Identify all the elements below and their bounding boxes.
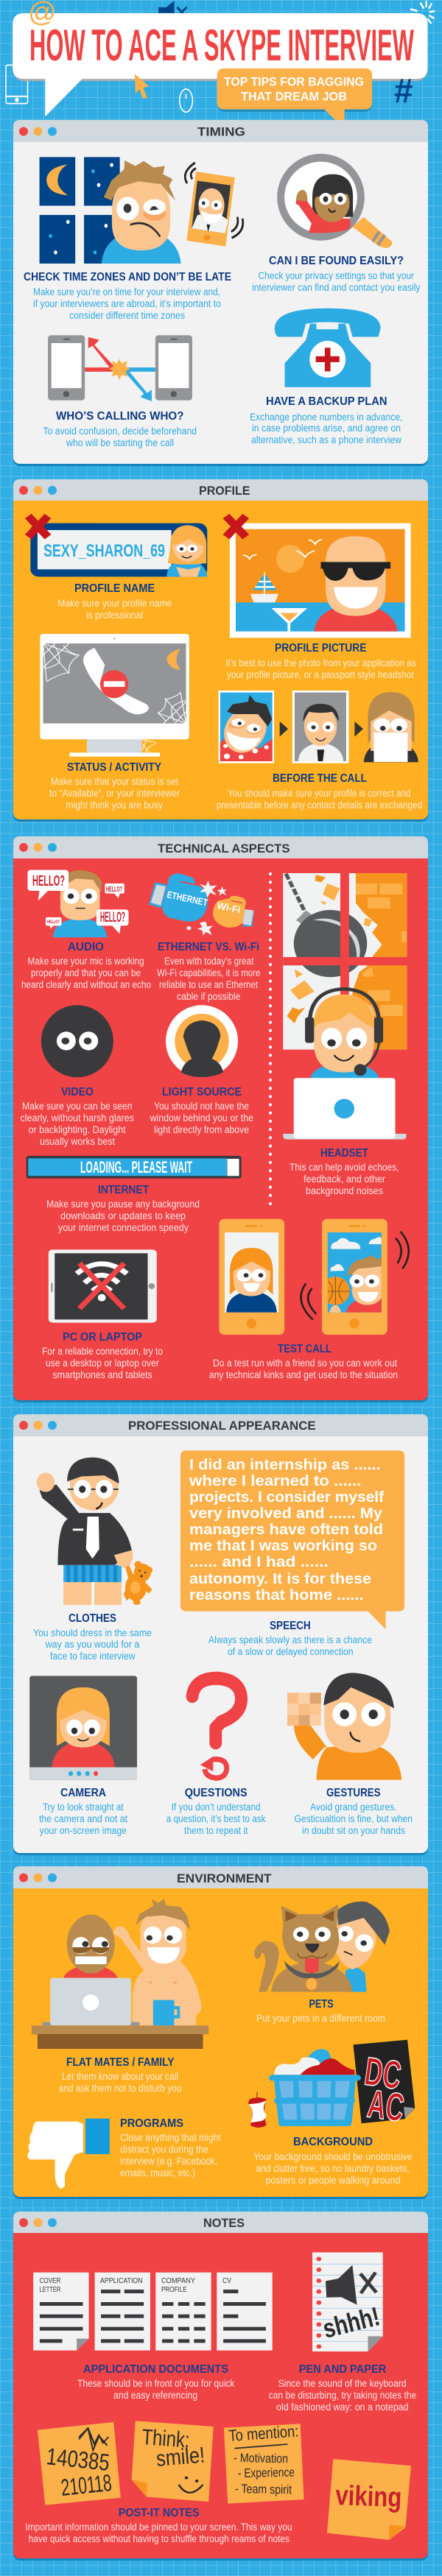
speech bubble: I did an internship as ...... bbox=[189, 1456, 381, 1473]
text: flat mates bbox=[59, 2071, 181, 2094]
text: gestures bbox=[295, 1802, 413, 1836]
text: speech: Always speak slowly as there is a chance bbox=[208, 1634, 372, 1645]
text: internet: downloads or updates to keep bbox=[60, 1210, 186, 1221]
icon: camera on-screen woman bbox=[29, 1676, 137, 1780]
text: pc or laptop: smartphones and tablets bbox=[53, 1369, 152, 1380]
heading: headset: HEADSET bbox=[320, 1147, 368, 1160]
text: camera: your on-screen image bbox=[40, 1825, 127, 1836]
window dots bbox=[19, 1421, 57, 1430]
text: gestures: Gesticualtion is fine, but when bbox=[295, 1813, 413, 1824]
icon: application documents: APPLICATION bbox=[100, 2276, 143, 2285]
icon: headset person with wrecking ball bbox=[283, 873, 407, 1140]
text: ethernet bbox=[157, 956, 261, 1002]
icon: emergency telephone bbox=[275, 308, 381, 387]
text: background: Your background should be unobtrusive bbox=[253, 2151, 413, 2162]
icon: boxing gloves ethernet vs wifi bbox=[149, 873, 253, 936]
speech bubble: reasons that home ...... bbox=[189, 1587, 364, 1603]
text: camera: Try to look straight at bbox=[43, 1802, 124, 1813]
speech bubble: where I learned to ...... bbox=[189, 1472, 361, 1489]
icon: tablet no wifi bbox=[49, 1249, 157, 1323]
speech bubble bbox=[180, 1450, 404, 1629]
text: post-it notes bbox=[25, 2522, 292, 2544]
heading: time zones: CHECK TIME ZONES AND DON’T BE LATE bbox=[24, 271, 231, 283]
text: audio: Make sure your mic is working bbox=[28, 956, 144, 967]
text: internet: Make sure you pause any background bbox=[46, 1199, 200, 1210]
icon: post-it notes: - Team spirit bbox=[235, 2482, 292, 2496]
text: questions bbox=[166, 1802, 266, 1836]
text: gestures: Avoid grand gestures. bbox=[310, 1802, 396, 1813]
text: post-it notes: Important information should be pinned to your screen. This way you bbox=[25, 2522, 292, 2533]
window dots bbox=[19, 486, 57, 495]
text: clothes: face to face interview bbox=[50, 1651, 136, 1662]
text: questions: them to repeat it bbox=[184, 1825, 248, 1836]
subtitle bubble bbox=[217, 68, 372, 129]
text: clothes: way as you would for a bbox=[45, 1639, 140, 1650]
icon: tired person at night with phone bbox=[40, 157, 243, 264]
logo: viking post-it: viking bbox=[335, 2480, 402, 2513]
heading: flat mates: FLAT MATES / FAMILY bbox=[66, 2056, 175, 2069]
heading: status: STATUS / ACTIVITY bbox=[67, 761, 162, 774]
text: flat mates: Let them know about your call bbox=[62, 2071, 178, 2082]
icon: magnifier with woman bbox=[277, 154, 392, 248]
loading bar bbox=[27, 1156, 242, 1179]
text: profile picture bbox=[225, 657, 416, 680]
icon: tablet outline bbox=[6, 65, 28, 104]
icon: post-it notes: To mention: bbox=[228, 2421, 299, 2445]
text: pen and paper: old fashioned way: on a notepad bbox=[276, 2402, 408, 2413]
text: profile name bbox=[57, 598, 172, 621]
text: gestures: in doubt sit on your hands bbox=[302, 1825, 405, 1836]
heading: ethernet: ETHERNET VS. Wi-Fi bbox=[158, 941, 259, 953]
text: video bbox=[21, 1101, 134, 1147]
text: found: Check your privacy settings so that your bbox=[258, 270, 414, 281]
text: found: interviewer can find and contact you easily bbox=[252, 282, 421, 293]
icon: notepad shhh bbox=[312, 2252, 383, 2351]
text: test call bbox=[209, 1358, 398, 1380]
heading: camera: CAMERA bbox=[60, 1787, 106, 1799]
text: application documents: and easy referencing bbox=[113, 2390, 197, 2401]
text: post-it notes: have quick access without having to shuffle through reams of notes bbox=[29, 2533, 290, 2544]
text: light source: window behind you or the bbox=[150, 1112, 253, 1123]
text: pc or laptop bbox=[42, 1346, 163, 1380]
heading: audio: AUDIO bbox=[68, 941, 104, 953]
text: audio: properly and that you can be bbox=[31, 967, 141, 978]
text: headset bbox=[290, 1162, 399, 1196]
panel: professional appearance bbox=[13, 1414, 428, 1855]
text: who's calling: who will be starting the call bbox=[66, 437, 174, 448]
icon: application documents: PROFILE bbox=[161, 2285, 187, 2294]
text: backup: in case problems arise, and agree on bbox=[252, 423, 401, 434]
text: test call: any technical kinks and get used to the situation bbox=[209, 1369, 398, 1380]
icon: audio person with hello bubbles: HELLO? bbox=[47, 920, 60, 925]
divider dots bbox=[269, 874, 272, 1209]
text: backup bbox=[250, 412, 402, 445]
icon: audio person with hello bubbles: HELLO? bbox=[100, 910, 125, 925]
heading: speech: SPEECH bbox=[270, 1620, 311, 1632]
speech bubble: managers have often told bbox=[189, 1521, 383, 1538]
window dots bbox=[19, 1873, 57, 1882]
text: pc or laptop: use a desktop or laptop over bbox=[46, 1358, 159, 1369]
heading: video: VIDEO bbox=[61, 1086, 94, 1098]
username: SEXY_SHARON_69 bbox=[43, 541, 165, 561]
icon: two phones calling bbox=[48, 335, 192, 401]
loading bar: LOADING... PLEASE WAIT bbox=[80, 1158, 192, 1176]
text: ethernet: cable if possible bbox=[177, 991, 240, 1002]
icon: holiday profile picture bbox=[226, 516, 411, 638]
text: programs: distract you during the bbox=[120, 2144, 208, 2155]
heading: post-it notes: POST-IT NOTES bbox=[119, 2507, 200, 2519]
panel: technical aspects bbox=[13, 836, 428, 1402]
subtitle bubble: TOP TIPS FOR BAGGING bbox=[224, 75, 364, 88]
text: clothes bbox=[33, 1627, 152, 1662]
text: speech: of a slow or delayed connection bbox=[228, 1646, 354, 1657]
text: status: Make sure that your status is set bbox=[51, 776, 178, 787]
icon: video dark face bbox=[41, 1005, 113, 1077]
text: questions: If you don’t understand bbox=[172, 1802, 261, 1813]
text: pen and paper: can be disturbing, try taking notes the bbox=[269, 2390, 416, 2401]
text: ethernet: Even with today’s great bbox=[164, 956, 254, 967]
heading: pets: PETS bbox=[309, 1998, 334, 2011]
text: backup: Exchange phone numbers in advance, bbox=[250, 412, 402, 423]
heading: environment: ENVIRONMENT bbox=[177, 1872, 271, 1885]
text: light source: You should not have the bbox=[154, 1101, 249, 1112]
text: background: and clutter free, so no laundry baskets, bbox=[256, 2163, 410, 2174]
text: pets: Put your pets in a different room bbox=[256, 2013, 385, 2024]
text: status: to “Available”, or your interviewer bbox=[49, 788, 180, 799]
icon: post-it notes: - Experience bbox=[238, 2466, 295, 2480]
text: before call: You should make sure your profile is correct and bbox=[228, 788, 411, 799]
text: background bbox=[253, 2151, 413, 2186]
text: speech bbox=[208, 1634, 372, 1657]
icon: backlit silhouette bbox=[166, 1005, 238, 1077]
text: questions: a question, it’s best to ask bbox=[166, 1813, 266, 1824]
heading: profile picture: PROFILE PICTURE bbox=[275, 642, 367, 654]
speech bubble: projects. I consider myself bbox=[189, 1489, 384, 1506]
icon: application documents: LETTER bbox=[40, 2285, 61, 2294]
window dots bbox=[19, 127, 57, 135]
icon: post-it notes bbox=[38, 2421, 304, 2505]
heading: who's calling: WHO’S CALLING WHO? bbox=[56, 410, 184, 423]
icon: loading sparkle bbox=[411, 1, 434, 23]
heading: gestures: GESTURES bbox=[326, 1787, 381, 1799]
heading: pc or laptop: PC OR LAPTOP bbox=[63, 1331, 142, 1344]
text: profile picture: your profile picture, or a passport style headshot bbox=[227, 669, 414, 680]
text: video: Make sure you can be seen bbox=[22, 1101, 133, 1112]
icon: flatmates behind laptop bbox=[32, 1899, 208, 2049]
icon: audio person with hello bubbles: HELLO? bbox=[106, 886, 122, 894]
text: programs: Close anything that might bbox=[120, 2132, 221, 2143]
speech bubble: ...... and I had ...... bbox=[189, 1553, 329, 1570]
text: programs: emails, music, etc.) bbox=[120, 2167, 195, 2178]
icon: profile name box with woman bbox=[28, 516, 207, 576]
text: pen and paper: Since the sound of the keyboard bbox=[278, 2378, 407, 2389]
panel: environment bbox=[13, 1866, 428, 2199]
text: programs bbox=[120, 2132, 221, 2178]
text: time zones: if your interviewers are abroad, it’s important to bbox=[33, 298, 221, 309]
text: before call bbox=[217, 788, 422, 811]
heading: before call: BEFORE THE CALL bbox=[273, 772, 367, 785]
window dots bbox=[19, 843, 57, 852]
text: headset: background noises bbox=[306, 1185, 383, 1196]
text: backup: alternative, such as a phone interview bbox=[251, 434, 401, 445]
text: who's calling: To avoid confusion, decide beforehand bbox=[43, 426, 197, 437]
heading: light source: LIGHT SOURCE bbox=[162, 1086, 242, 1098]
text: found bbox=[252, 270, 421, 293]
text: light source bbox=[150, 1101, 253, 1135]
text: time zones: consider different time zones bbox=[69, 310, 185, 321]
icon: application documents bbox=[33, 2273, 273, 2351]
text: test call: Do a test run with a friend so you can work out bbox=[213, 1358, 397, 1369]
icon: boxing gloves ethernet vs wifi: ETHERNET bbox=[166, 889, 208, 908]
icon: hash: # bbox=[394, 71, 413, 110]
heading: test call: TEST CALL bbox=[278, 1343, 332, 1355]
text: profile name: Make sure your profile name bbox=[57, 598, 172, 609]
text: time zones: Make sure you’re on time for your interview and, bbox=[33, 286, 220, 297]
icon: dog and owner bbox=[254, 1902, 390, 1992]
heading: profile: PROFILE bbox=[199, 484, 250, 498]
heading: technical: TECHNICAL ASPECTS bbox=[158, 842, 290, 855]
icon: speaker muted bbox=[158, 1, 186, 23]
subtitle bubble: THAT DREAM JOB bbox=[241, 90, 347, 103]
text: internet: your internet connection speedy bbox=[58, 1222, 189, 1233]
icon: two phones test call bbox=[219, 1219, 409, 1335]
icon: suit man with boxers and teddy bbox=[37, 1458, 152, 1609]
heading: background: BACKGROUND bbox=[293, 2136, 373, 2148]
heading: internet: INTERNET bbox=[98, 1184, 149, 1196]
heading: programs: PROGRAMS bbox=[120, 2117, 183, 2130]
speech bubble: me that I was working so bbox=[189, 1537, 377, 1554]
panel: notes bbox=[13, 2212, 428, 2561]
text: light source: light directly from above bbox=[154, 1124, 249, 1135]
header decorations bbox=[6, 1, 434, 104]
icon: audio person with hello bubbles: HELLO? bbox=[32, 873, 65, 889]
icon: laundry basket, apple core, poster bbox=[248, 2040, 415, 2131]
panel: timing bbox=[13, 120, 428, 466]
text: profile picture: It’s best to use the photo from your application as bbox=[225, 657, 416, 668]
icon: notepad shhh: shhh! bbox=[320, 2301, 383, 2344]
text: internet bbox=[46, 1199, 200, 1233]
text: ethernet: reliable to use an Ethernet bbox=[159, 979, 258, 990]
icon: application documents: CV bbox=[222, 2276, 231, 2285]
heading: found: CAN I BE FOUND EASILY? bbox=[269, 255, 404, 267]
panel: profile bbox=[13, 479, 428, 822]
text: video: clearly, without harsh glares bbox=[21, 1112, 134, 1123]
text: clothes: You should dress in the same bbox=[33, 1627, 152, 1639]
icons: cursor and mouse bbox=[135, 74, 192, 112]
icon: before the call photos bbox=[217, 691, 418, 763]
icon: monitor do not disturb bbox=[40, 634, 189, 757]
title speech bubble bbox=[13, 13, 428, 116]
icon: laundry basket, apple core, poster: DC bbox=[362, 2049, 404, 2098]
heading: application documents: APPLICATION DOCUMENTS bbox=[83, 2363, 228, 2376]
text: camera bbox=[39, 1802, 127, 1836]
heading: notes: NOTES bbox=[203, 2217, 245, 2230]
text: time zones bbox=[33, 286, 221, 321]
heading: pen and paper: PEN AND PAPER bbox=[299, 2363, 386, 2376]
text: pen and paper bbox=[269, 2378, 416, 2413]
text: application documents bbox=[77, 2378, 235, 2401]
text: camera: the camera and not at bbox=[39, 1813, 127, 1824]
text: pc or laptop: For a reliable connection, try to bbox=[42, 1346, 163, 1357]
window dots bbox=[19, 2218, 57, 2227]
icon: boxing gloves ethernet vs wifi: Wi-Fi bbox=[216, 900, 242, 916]
heading: questions: QUESTIONS bbox=[185, 1787, 248, 1799]
heading: professional appearance: PROFESSIONAL APPEARANCE bbox=[128, 1419, 316, 1433]
text: profile name: is professional bbox=[86, 610, 143, 621]
logo: viking post-it bbox=[327, 2459, 411, 2540]
text: status bbox=[49, 776, 180, 811]
icon: post-it notes: Think: bbox=[141, 2425, 191, 2453]
text: headset: This can help avoid echoes, bbox=[290, 1162, 399, 1173]
text: ethernet: Wi-Fi capabilities, it is more bbox=[157, 967, 261, 978]
heading: timing: TIMING bbox=[197, 125, 245, 138]
icon: post-it notes: 210118 bbox=[60, 2469, 113, 2501]
text: who's calling bbox=[43, 426, 197, 448]
heading: backup: HAVE A BACKUP PLAN bbox=[266, 395, 387, 408]
text: background: posters or people walking around bbox=[265, 2175, 400, 2186]
icon: application documents: COMPANY bbox=[161, 2276, 195, 2285]
icon: post-it notes: smile! bbox=[155, 2443, 206, 2471]
text: audio: heard clearly and without an echo bbox=[21, 979, 151, 990]
text: headset: feedback, and other bbox=[304, 1174, 385, 1185]
text: audio bbox=[21, 956, 151, 990]
speech bubble: very involved and ...... My bbox=[189, 1505, 383, 1522]
text: application documents: These should be in front of you for quick bbox=[77, 2378, 235, 2389]
icon: laundry basket, apple core, poster: AC bbox=[365, 2081, 407, 2131]
icon: post-it notes: - Motivation bbox=[234, 2451, 288, 2466]
icon: question mark with repeat bbox=[192, 1679, 242, 1778]
text: flat mates: and ask them not to disturb you bbox=[59, 2083, 181, 2094]
icon: application documents: COVER bbox=[40, 2276, 61, 2285]
icon: rude gesture pixelated bbox=[287, 1673, 401, 1780]
text: video: or backlighting. Daylight bbox=[29, 1124, 126, 1135]
text: status: might think you are busy bbox=[66, 800, 163, 811]
icon: post-it notes: 140385 bbox=[45, 2443, 111, 2476]
heading: profile name: PROFILE NAME bbox=[74, 582, 155, 595]
icon: thumbs down bbox=[27, 2119, 110, 2189]
speech bubble: autonomy. It is for these bbox=[189, 1570, 371, 1587]
text: programs: interview (e.g. Facebook, bbox=[120, 2156, 217, 2167]
icon: audio person with hello bubbles bbox=[28, 870, 129, 937]
heading: clothes: CLOTHES bbox=[69, 1612, 116, 1625]
text: video: usually works best bbox=[40, 1136, 115, 1147]
